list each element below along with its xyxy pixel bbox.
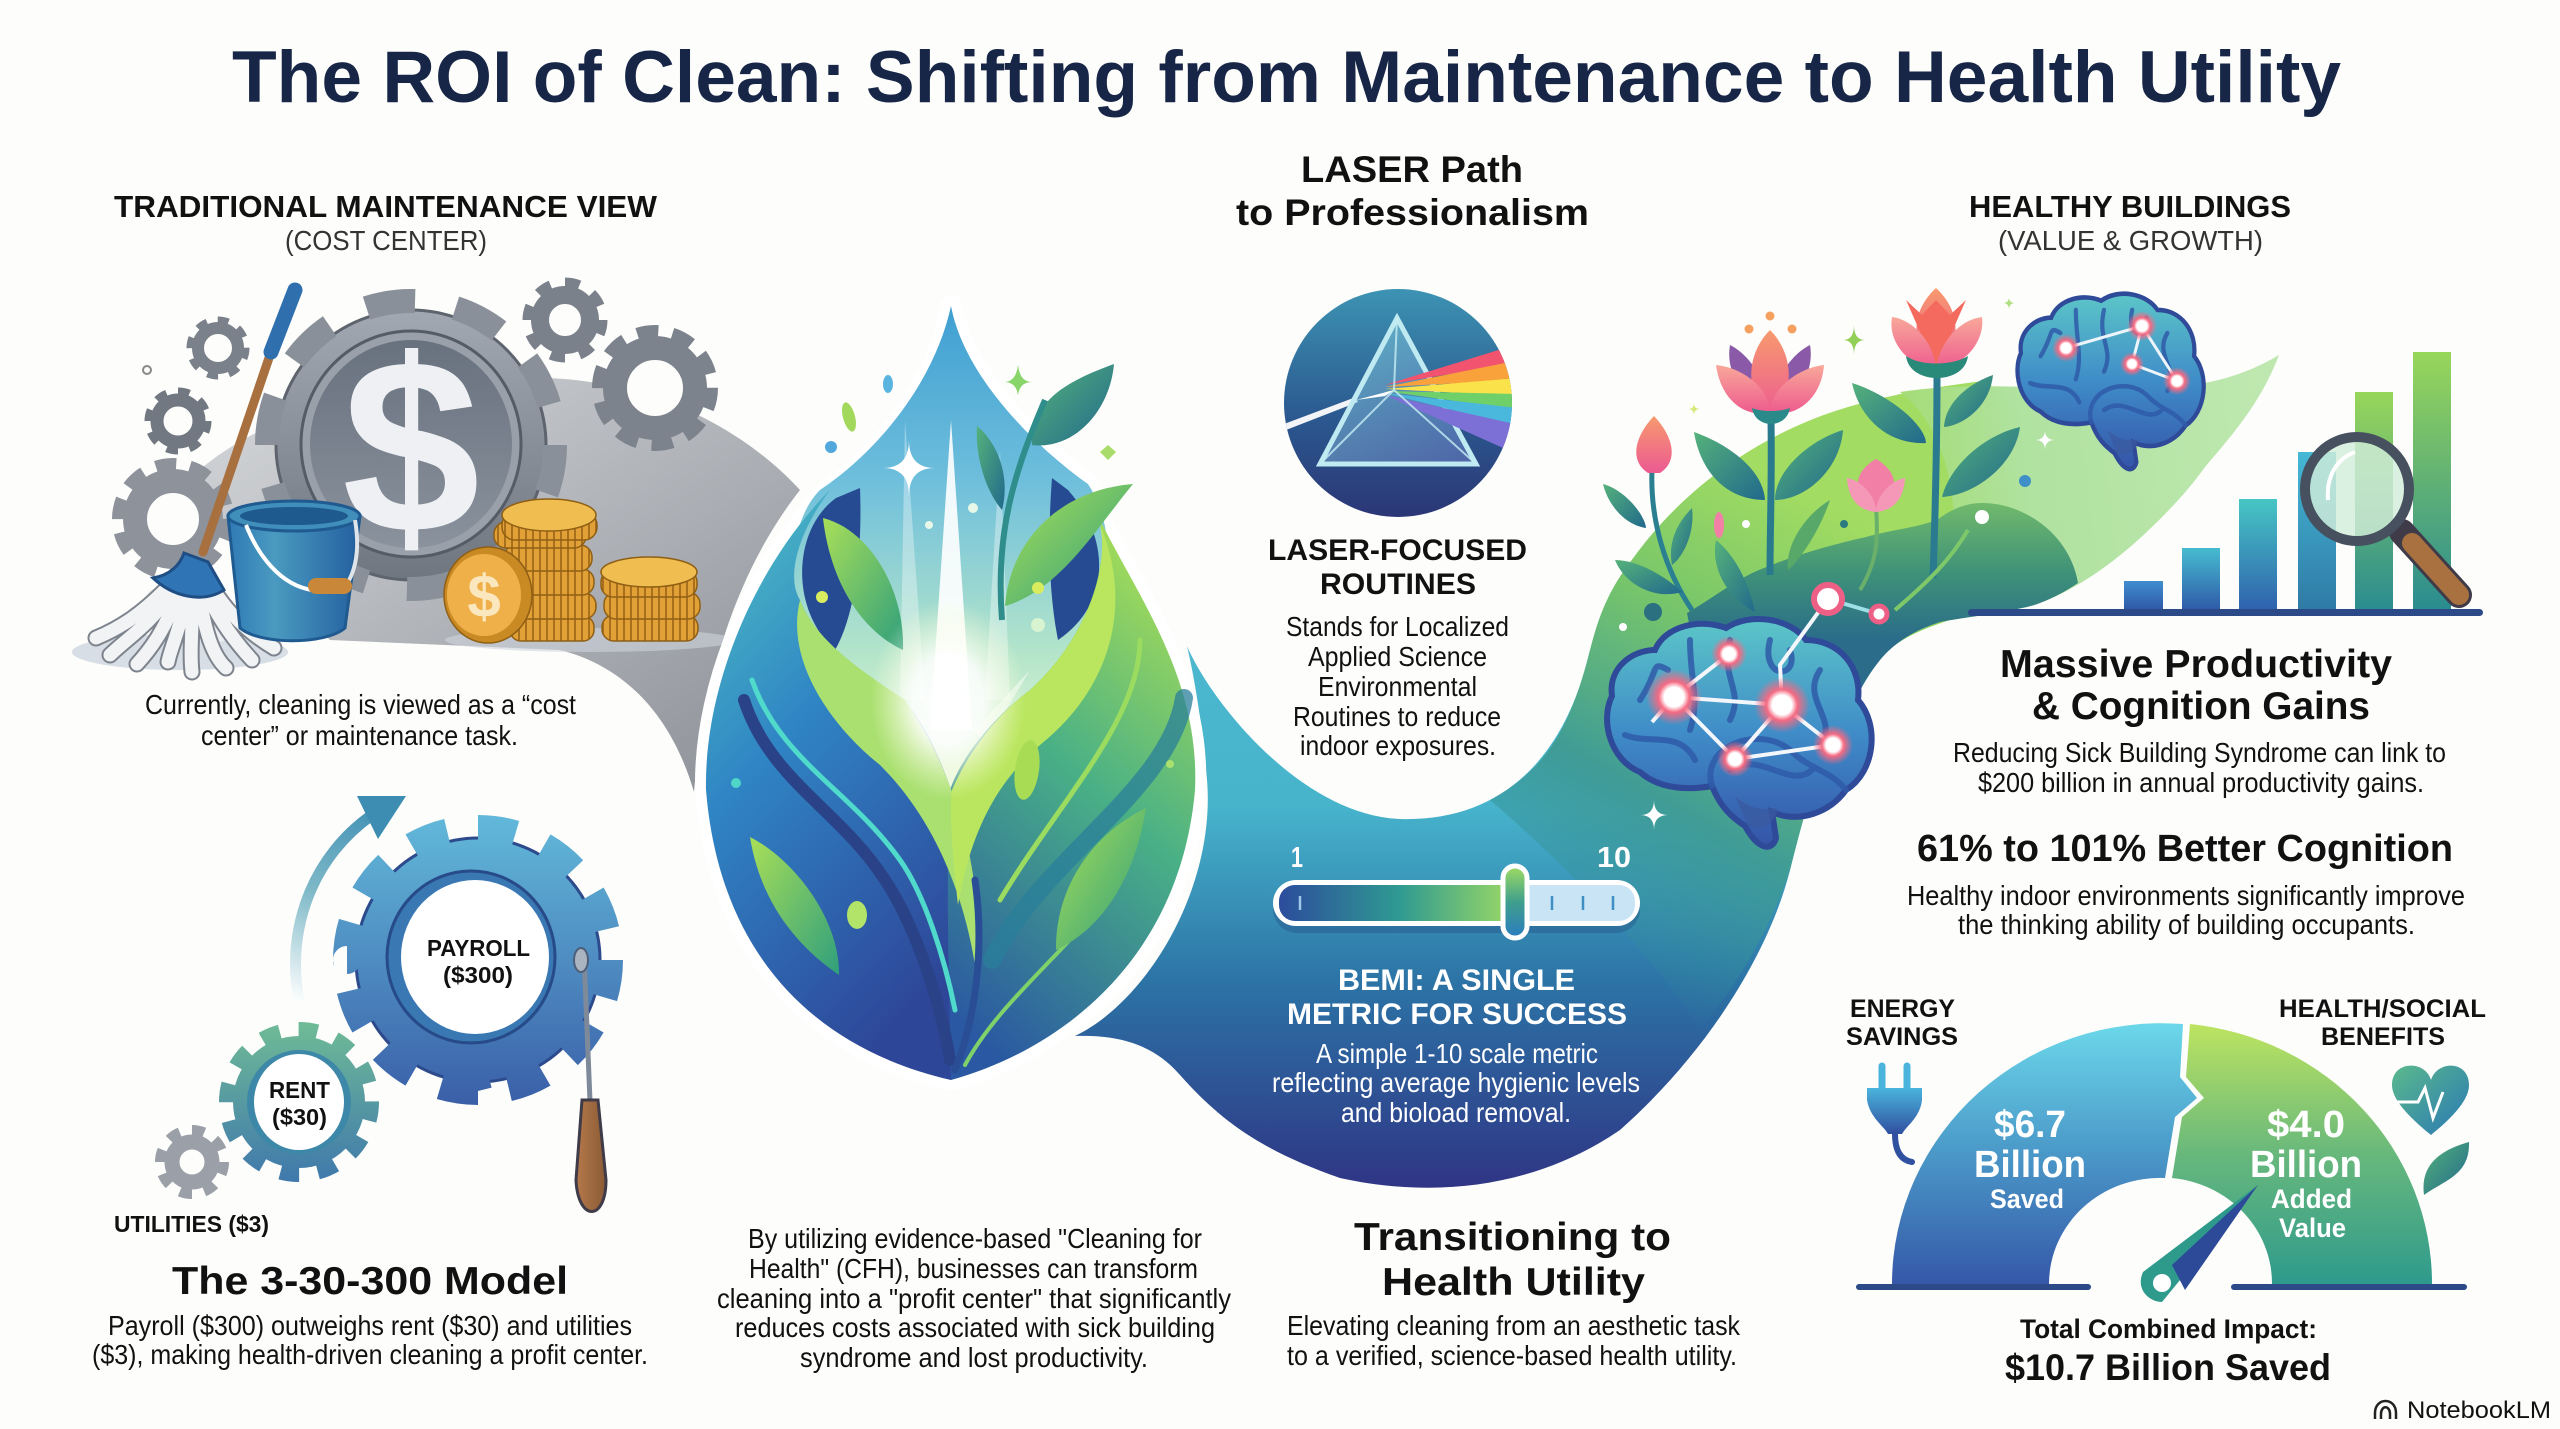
panel: transitioning to health utility: Transitioning to [1354, 1216, 1671, 1259]
leaves and accents [1619, 297, 2055, 631]
panel: combined impact gauge [1846, 995, 2486, 1388]
illustration: central leaf droplet [706, 306, 1195, 1080]
flowing ribbon: blue to green [1075, 355, 2279, 1188]
text: cleaning for health: reduces costs associated with sick building [735, 1312, 1215, 1343]
values: health and social: Added [2271, 1184, 2352, 1214]
icon: rent gear: ($30) [272, 1104, 327, 1130]
bar chart [1968, 352, 2483, 616]
icon: payroll gear: ($300) [443, 962, 513, 988]
panel: transitioning to health utility: to a verified, science-based health utility. [1287, 1340, 1737, 1371]
title: The ROI of Clean: Shifting from Maintenance to Health Utility [232, 37, 2341, 118]
gauge: energy savings segment [1892, 1023, 2197, 1284]
text: BEMI description: reflecting average hygienic levels [1272, 1067, 1640, 1098]
icon: utilities gear [160, 1130, 224, 1194]
heading: 3-30-300 model: The 3-30-300 Model [172, 1260, 568, 1303]
text: laser description: indoor exposures. [1300, 730, 1496, 761]
label: energy savings [1846, 995, 1958, 1051]
text: productivity description: $200 billion in annual productivity gains. [1978, 767, 2424, 798]
heading: better cognition: 61% to 101% Better Cognition [1917, 828, 2453, 870]
heading: BEMI: BEMI: A SINGLE [1338, 964, 1575, 997]
heading: LASER path [1236, 149, 1589, 233]
text: BEMI description [1272, 1038, 1640, 1128]
values: health and social: Billion [2250, 1144, 2362, 1186]
icon: small gears [119, 283, 711, 573]
slider: BEMI scale: 10 [1597, 842, 1631, 874]
panel: healthy buildings [1603, 189, 2483, 940]
text: cleaning for health: cleaning into a "profit center" that significantly [717, 1283, 1231, 1314]
leaf: small accents [750, 364, 1146, 975]
icon: payroll gear [347, 829, 609, 1091]
icon: heart pulse [2392, 1066, 2469, 1135]
flower: tall right [1852, 288, 2020, 578]
text: cost center description: center” or maintenance task. [201, 720, 518, 751]
label: health and social benefits [2279, 995, 2486, 1051]
icon: mop [72, 290, 295, 672]
label: energy savings: ENERGY [1850, 995, 1955, 1023]
icon: rent gear [228, 1031, 370, 1173]
text: laser description [1286, 611, 1509, 761]
icon: large dollar gear [267, 301, 555, 589]
icon: magnifying glass [2305, 437, 2459, 595]
NotebookLM watermark: NotebookLM [2407, 1397, 2551, 1424]
central glow [870, 600, 1026, 800]
panel: 3-30-300 model [92, 796, 648, 1370]
icon: coin stacks: $ [467, 563, 501, 630]
leaf: left body [706, 490, 985, 1080]
icon: small brain [2017, 294, 2204, 469]
sparkles and droplets [731, 365, 1174, 788]
flowers [1603, 288, 2055, 631]
arrow: growth [296, 796, 406, 1002]
heading: healthy buildings: HEALTHY BUILDINGS [1969, 189, 2291, 224]
panel: transitioning to health utility: Health Utility [1382, 1261, 1645, 1304]
heading: productivity and cognition: Massive Productivity [2000, 643, 2392, 686]
gauge: health and social segment [2172, 1024, 2432, 1284]
gray backdrop swoosh [186, 378, 800, 792]
label: health and social benefits: BENEFITS [2321, 1023, 2445, 1051]
panel: transitioning to health utility [1287, 1216, 1741, 1371]
icon: large dollar gear: $ [342, 307, 480, 585]
label: health and social benefits: HEALTH/SOCIAL [2279, 995, 2486, 1023]
text: cognition description: Healthy indoor environments significantly improve [1907, 880, 2465, 911]
heading: LASER path: to Professionalism [1236, 192, 1589, 233]
icon: prism [1284, 289, 1520, 517]
heading: laser-focused routines: LASER-FOCUSED [1268, 534, 1527, 567]
panel: LASER path [1236, 149, 1640, 1128]
text: BEMI description: A simple 1-10 scale metric [1316, 1038, 1598, 1069]
heading: traditional maintenance: TRADITIONAL MAINTENANCE VIEW [114, 189, 658, 224]
icon: bucket [228, 501, 360, 641]
values: energy savings: Saved [1990, 1184, 2064, 1214]
text: 3-30-300 description [92, 1310, 648, 1370]
text: productivity description: Reducing Sick Building Syndrome can link to [1953, 737, 2446, 768]
slider: BEMI scale: 1 [1291, 842, 1303, 874]
panel: traditional maintenance view [72, 189, 800, 792]
heading: productivity and cognition: & Cognition Gains [2032, 685, 2370, 728]
heading: laser-focused routines [1268, 534, 1527, 601]
heading: LASER path: LASER Path [1301, 149, 1523, 190]
total impact: $10.7 Billion Saved [2005, 1347, 2331, 1388]
droplet core [793, 306, 1108, 810]
values: health and social: $4.0 [2267, 1104, 2345, 1146]
label: energy savings: SAVINGS [1846, 1023, 1958, 1051]
text: 3-30-300 description: ($3), making health-driven cleaning a profit center. [92, 1339, 648, 1370]
heading: traditional maintenance: (COST CENTER) [285, 225, 487, 256]
label: utilities: UTILITIES ($3) [114, 1211, 269, 1237]
text: cleaning for health [717, 1223, 1231, 1373]
panel: transitioning to health utility: Elevating cleaning from an aesthetic task [1287, 1310, 1741, 1341]
dark inner sides [802, 478, 1099, 650]
heading: healthy buildings: (VALUE & GROWTH) [1998, 225, 2263, 256]
heading: BEMI: METRIC FOR SUCCESS [1287, 998, 1627, 1031]
slider: BEMI scale [1273, 842, 1640, 938]
text: laser description: Applied Science [1308, 641, 1487, 672]
icon: lever handle [574, 948, 606, 1212]
text: cognition description: the thinking ability of building occupants. [1958, 909, 2415, 940]
icon: payroll gear: PAYROLL [427, 935, 530, 961]
leaf: lime inner bands [797, 525, 1115, 965]
gauge: needle [2141, 1185, 2258, 1302]
flower: purple center [1694, 312, 1843, 575]
heading: BEMI [1287, 964, 1627, 1031]
text: productivity description [1953, 737, 2446, 798]
light beams [851, 420, 1030, 745]
leaf details [744, 640, 1184, 1070]
text: cognition description [1907, 880, 2465, 940]
gauge: base lines [1856, 1284, 2467, 1290]
icon: large brain with network [1607, 585, 1887, 847]
text: cleaning for health: By utilizing evidence-based "Cleaning for [748, 1223, 1202, 1254]
text: laser description: Routines to reduce [1293, 701, 1501, 732]
values: energy savings: Billion [1974, 1144, 2086, 1186]
icon: leaf [2423, 1142, 2469, 1195]
flower: bud left [1603, 416, 1693, 610]
leaf: right body [948, 520, 1195, 1080]
values: energy savings [1974, 1104, 2086, 1214]
heading: laser-focused routines: ROUTINES [1320, 568, 1476, 601]
values: health and social: Value [2279, 1213, 2346, 1243]
text: cleaning for health: syndrome and lost productivity. [800, 1342, 1148, 1373]
text: BEMI description: and bioload removal. [1341, 1097, 1571, 1128]
icon: plug [1867, 1066, 1922, 1162]
values: energy savings: $6.7 [1994, 1104, 2066, 1146]
heading: productivity and cognition [2000, 643, 2392, 728]
heading: traditional maintenance [114, 189, 658, 256]
dark hill [1687, 503, 2078, 740]
text: cost center description [145, 689, 576, 751]
flower: small pink [1847, 459, 1905, 590]
text: 3-30-300 description: Payroll ($300) outweighs rent ($30) and utilities [108, 1310, 632, 1341]
text: laser description: Stands for Localized [1286, 611, 1509, 642]
text: cost center description: Currently, cleaning is viewed as a “cost [145, 689, 576, 720]
heading: healthy buildings [1969, 189, 2291, 256]
text: cleaning for health: Health" (CFH), businesses can transform [749, 1253, 1198, 1284]
values: health and social [2250, 1104, 2362, 1243]
icon: rent gear: RENT [269, 1077, 330, 1103]
text: laser description: Environmental [1318, 671, 1477, 702]
total impact [2005, 1314, 2331, 1388]
total impact: Total Combined Impact: [2020, 1314, 2317, 1344]
icon: coin stacks [444, 499, 735, 652]
